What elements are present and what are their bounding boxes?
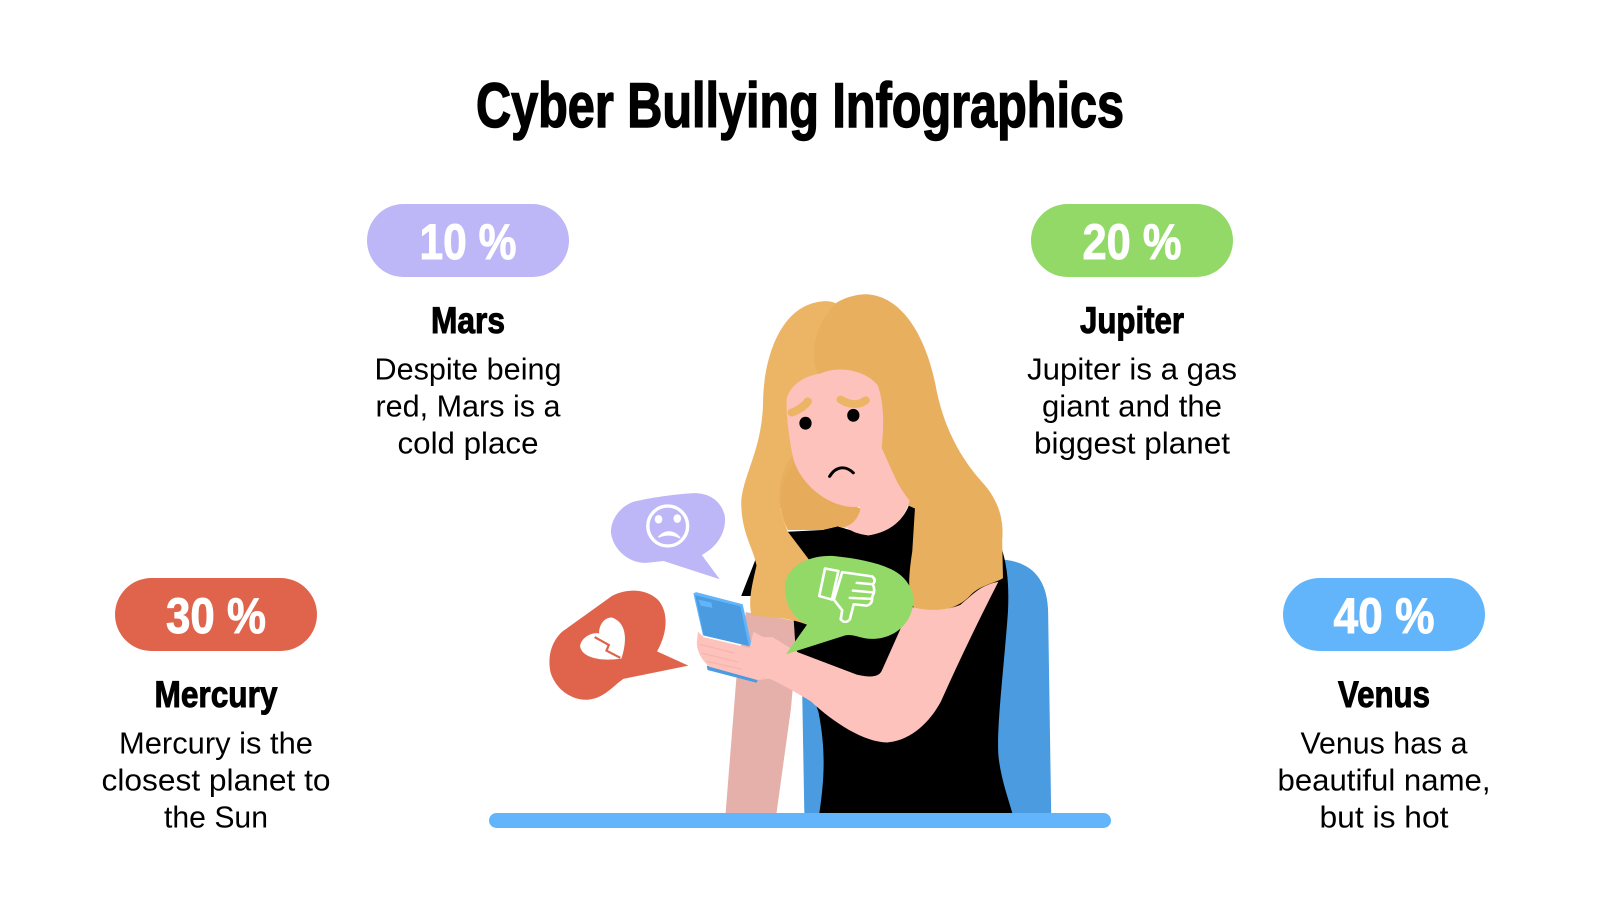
Mercury description: the Sun: [164, 800, 268, 834]
speech bubble: thumbs down: [785, 556, 913, 654]
hair: [741, 294, 1003, 625]
panel: Jupiter: [1027, 204, 1237, 460]
Venus value pill: [1283, 578, 1485, 651]
panel: Mars: [367, 204, 569, 460]
Venus value pill: 40 %: [1334, 588, 1434, 644]
eyes: [799, 409, 859, 430]
Mercury heading: Mercury: [154, 674, 278, 715]
Venus description: Venus has a: [1300, 726, 1468, 760]
Mercury value pill: 30 %: [166, 588, 266, 644]
Jupiter value pill: [1031, 204, 1233, 277]
Jupiter value pill: 20 %: [1082, 214, 1182, 270]
Jupiter description: biggest planet: [1034, 426, 1230, 460]
Venus heading: Venus: [1338, 674, 1430, 715]
chair: [802, 560, 1051, 814]
Mars value pill: [367, 204, 569, 277]
Jupiter description: Jupiter is a gas: [1027, 352, 1237, 386]
Mars heading: Mars: [431, 300, 505, 341]
desk: [489, 813, 1111, 828]
Mercury value pill: [115, 578, 317, 651]
phone: [693, 592, 758, 683]
Mars description: cold place: [398, 426, 538, 460]
far arm: [726, 612, 796, 814]
Mercury description: closest planet to: [102, 762, 330, 798]
Mars description: red, Mars is a: [376, 388, 561, 424]
speech bubble: broken heart: [549, 591, 688, 700]
face: [787, 370, 897, 507]
Venus description: beautiful name,: [1278, 762, 1490, 798]
Jupiter heading: Jupiter: [1080, 300, 1184, 341]
dress: [741, 501, 1013, 814]
Mercury description: Mercury is the: [119, 726, 313, 760]
Venus description: [1278, 726, 1490, 834]
Mars description: Despite being: [374, 352, 562, 386]
Jupiter description: [1027, 352, 1237, 460]
Mars value pill: 10 %: [420, 214, 516, 270]
mouth: [830, 468, 853, 476]
Mars description: [374, 352, 562, 460]
eyebrows: [792, 400, 866, 412]
speech bubble: sad face: [611, 493, 725, 579]
Venus description: but is hot: [1320, 800, 1449, 834]
title: Cyber Bullying Infographics: [476, 71, 1124, 141]
Jupiter description: giant and the: [1042, 388, 1222, 424]
Mercury description: [102, 726, 330, 834]
panel: Mercury: [102, 578, 330, 834]
illustration: girl at desk looking at phone: [549, 294, 1051, 814]
near arm: [753, 582, 998, 742]
panel: Venus: [1278, 578, 1490, 834]
hand: [697, 632, 788, 680]
neck: [845, 448, 910, 535]
